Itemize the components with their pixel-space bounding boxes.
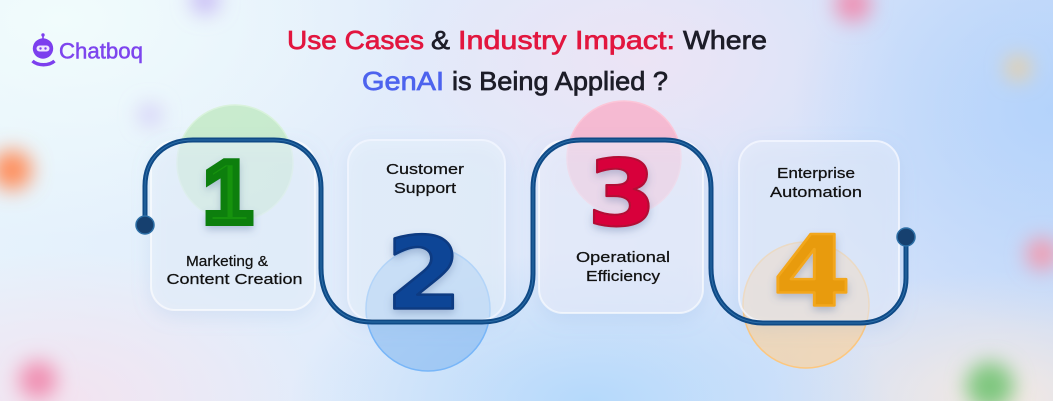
circle: pink [567, 101, 681, 215]
card 3 [539, 141, 703, 313]
title: Use Cases [287, 25, 424, 55]
panel: customer support [348, 140, 505, 320]
card 1 [151, 141, 315, 310]
circle: orange [743, 242, 869, 368]
title: Where [683, 25, 767, 55]
end dot [897, 228, 915, 246]
icon: robot [32, 33, 54, 65]
numeral 2: 2 [386, 215, 462, 332]
numeral 3: 3 [587, 139, 657, 247]
label 1: Marketing & [186, 253, 268, 270]
start dot [136, 216, 154, 234]
label 4: Automation [770, 184, 862, 201]
circle: green [177, 105, 293, 221]
label 3: Operational [576, 249, 670, 266]
connector line [145, 140, 906, 323]
label 2: Customer [386, 161, 464, 178]
numeral 4: 4 [773, 215, 851, 329]
title: & [431, 25, 450, 55]
label 3: Efficiency [586, 268, 661, 285]
title: GenAI [362, 66, 444, 96]
numeral 1: 1 [204, 142, 252, 242]
label 1: Content Creation [166, 271, 302, 288]
title [287, 25, 767, 96]
panel: marketing and content creation [151, 141, 315, 310]
card 2 [348, 140, 505, 320]
label 2: Support [394, 180, 457, 197]
title: is Being Applied ? [452, 66, 668, 96]
panel: operational efficiency [539, 141, 703, 313]
wordmark: Chatboq [59, 38, 143, 64]
circle: blue [366, 247, 490, 371]
logo: Chatboq [32, 33, 143, 65]
panel: enterprise automation [739, 141, 899, 321]
title: Industry Impact: [458, 25, 675, 55]
label 4: Enterprise [777, 165, 855, 182]
card 4 [739, 141, 899, 321]
